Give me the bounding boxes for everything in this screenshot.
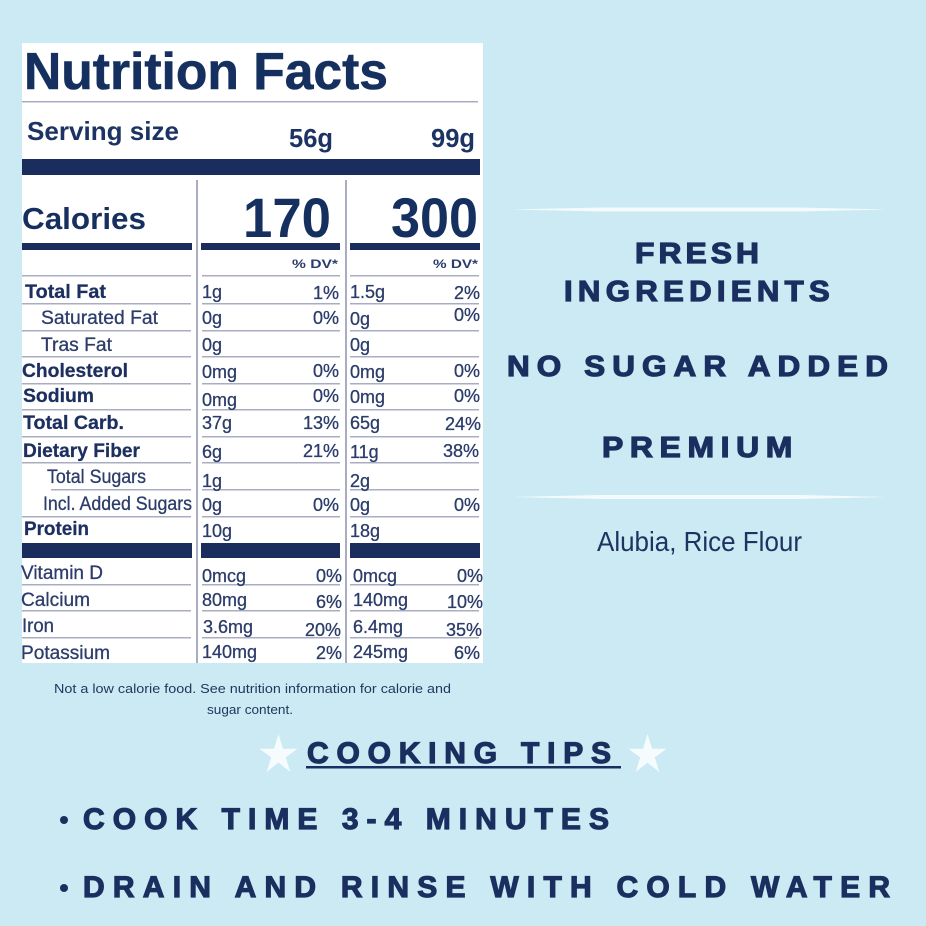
column: 56g values: 0% (313, 361, 339, 381)
column: 56g values: 37g (202, 413, 232, 433)
footnote: sugar content. (207, 702, 293, 717)
calories row: 170 (243, 186, 331, 249)
column: 99g values: 65g (350, 413, 380, 433)
ingredients text: Alubia, Rice Flour (597, 526, 802, 557)
nutrient labels: Calcium (21, 590, 90, 611)
column: 56g values (202, 282, 342, 663)
nutrient labels: Total Sugars (47, 467, 146, 488)
column: 56g values: 13% (303, 413, 339, 433)
column: 99g values: 0% (454, 305, 480, 325)
heading: cooking tips: COOKING TIPS (307, 737, 611, 770)
nutrient labels: Total Carb. (23, 412, 124, 434)
column: 56g values: 140mg (202, 642, 257, 662)
claim: premium: PREMIUM (602, 432, 799, 464)
claim: fresh ingredients (564, 238, 835, 308)
column: 56g values: 0g (202, 308, 222, 328)
column: 99g values: 0g (350, 335, 370, 355)
column: 56g values: 0mg (202, 390, 237, 410)
column: 99g values: 35% (446, 620, 482, 640)
nutrient labels: Tras Fat (41, 335, 113, 356)
nutrient labels: Dietary Fiber (23, 440, 140, 462)
column: 99g values: 0mg (350, 362, 385, 382)
heading: nutrition facts: Nutrition Facts (24, 43, 388, 101)
column: 99g values: 0mcg (353, 566, 397, 586)
column: 56g values: 1% (313, 283, 339, 303)
column: 99g values: 245mg (353, 642, 408, 662)
column: 99g values: 10% (447, 592, 483, 612)
column: 99g values: 0g (350, 495, 370, 515)
column: 56g values: 0% (313, 495, 339, 515)
calories row (22, 186, 478, 249)
nutrient labels: Potassium (21, 643, 110, 664)
nutrient labels: Saturated Fat (41, 308, 159, 329)
column: 56g values: 0mcg (202, 566, 246, 586)
calories row: Calories (22, 201, 146, 236)
calories row: 300 (391, 186, 478, 249)
column: 99g values: 6.4mg (353, 617, 403, 637)
serving size row: 56g (289, 125, 333, 153)
column: 56g values: 0% (316, 566, 342, 586)
tip: cook time: COOK TIME 3-4 MINUTES (83, 803, 609, 836)
column: 99g values: 0% (454, 361, 480, 381)
column: 56g values: 0g (202, 495, 222, 515)
column: 56g values: 21% (303, 441, 339, 461)
panel: nutrition facts table (21, 43, 483, 664)
divider: bottom brush stroke (512, 495, 887, 499)
column: 99g values: 1.5g (350, 282, 385, 302)
nutrient labels: Total Fat (25, 281, 107, 303)
nutrient labels (21, 281, 192, 664)
percent daily value headers (292, 257, 478, 271)
column: 99g values: 0% (457, 566, 483, 586)
column: 56g values: 0% (313, 308, 339, 328)
icon: right star (628, 734, 666, 772)
column: 56g values: 6g (202, 442, 222, 462)
column: 56g values: 0g (202, 335, 222, 355)
footnote (54, 681, 451, 717)
claim: no sugar added: NO SUGAR ADDED (507, 351, 895, 383)
nutrient labels: Incl. Added Sugars (43, 494, 192, 515)
divider: top brush stroke (512, 208, 887, 212)
column: 99g values: 24% (445, 414, 481, 434)
column: 99g values: 11g (350, 442, 379, 462)
nutrient labels: Cholesterol (22, 360, 128, 382)
serving size row: Serving size (27, 116, 179, 146)
column: 99g values: 140mg (353, 590, 408, 610)
serving size row (27, 116, 475, 153)
nutrient labels: Vitamin D (21, 563, 103, 584)
percent daily value headers: % DV* (433, 257, 478, 271)
nutrient labels: Iron (22, 616, 54, 637)
percent daily value headers: % DV* (292, 257, 338, 271)
column: 99g values: 0g (350, 309, 370, 329)
column: 99g values: 0% (454, 386, 480, 406)
column: 99g values (350, 282, 483, 663)
column: 99g values: 0mg (350, 387, 385, 407)
column: 56g values: 6% (316, 592, 342, 612)
column: 56g values: 1g (202, 282, 222, 302)
icon: left star (260, 734, 298, 772)
serving size row: 99g (431, 125, 475, 153)
column: 99g values: 0% (454, 495, 480, 515)
column: 56g values: 2% (316, 643, 342, 663)
column: 99g values: 2% (454, 283, 480, 303)
column: 99g values: 38% (443, 441, 479, 461)
claim: fresh ingredients: INGREDIENTS (564, 276, 835, 308)
column: 56g values: 0mg (202, 362, 237, 382)
column: 56g values: 3.6mg (203, 617, 253, 637)
footnote: Not a low calorie food. See nutrition information for calorie and (54, 681, 451, 696)
column: 99g values: 18g (350, 521, 380, 541)
column: 56g values: 0% (313, 386, 339, 406)
column: 56g values: 80mg (202, 590, 247, 610)
column: 56g values: 1g (202, 471, 222, 491)
column: 99g values: 2g (350, 471, 370, 491)
nutrient labels: Protein (24, 518, 89, 540)
column: 56g values: 10g (202, 521, 232, 541)
tip: drain and rinse: DRAIN AND RINSE WITH COLD WATER (83, 871, 890, 904)
claim: fresh ingredients: FRESH (635, 238, 763, 270)
column: 99g values: 6% (454, 643, 480, 663)
column: 56g values: 20% (305, 620, 341, 640)
nutrient labels: Sodium (23, 385, 94, 407)
